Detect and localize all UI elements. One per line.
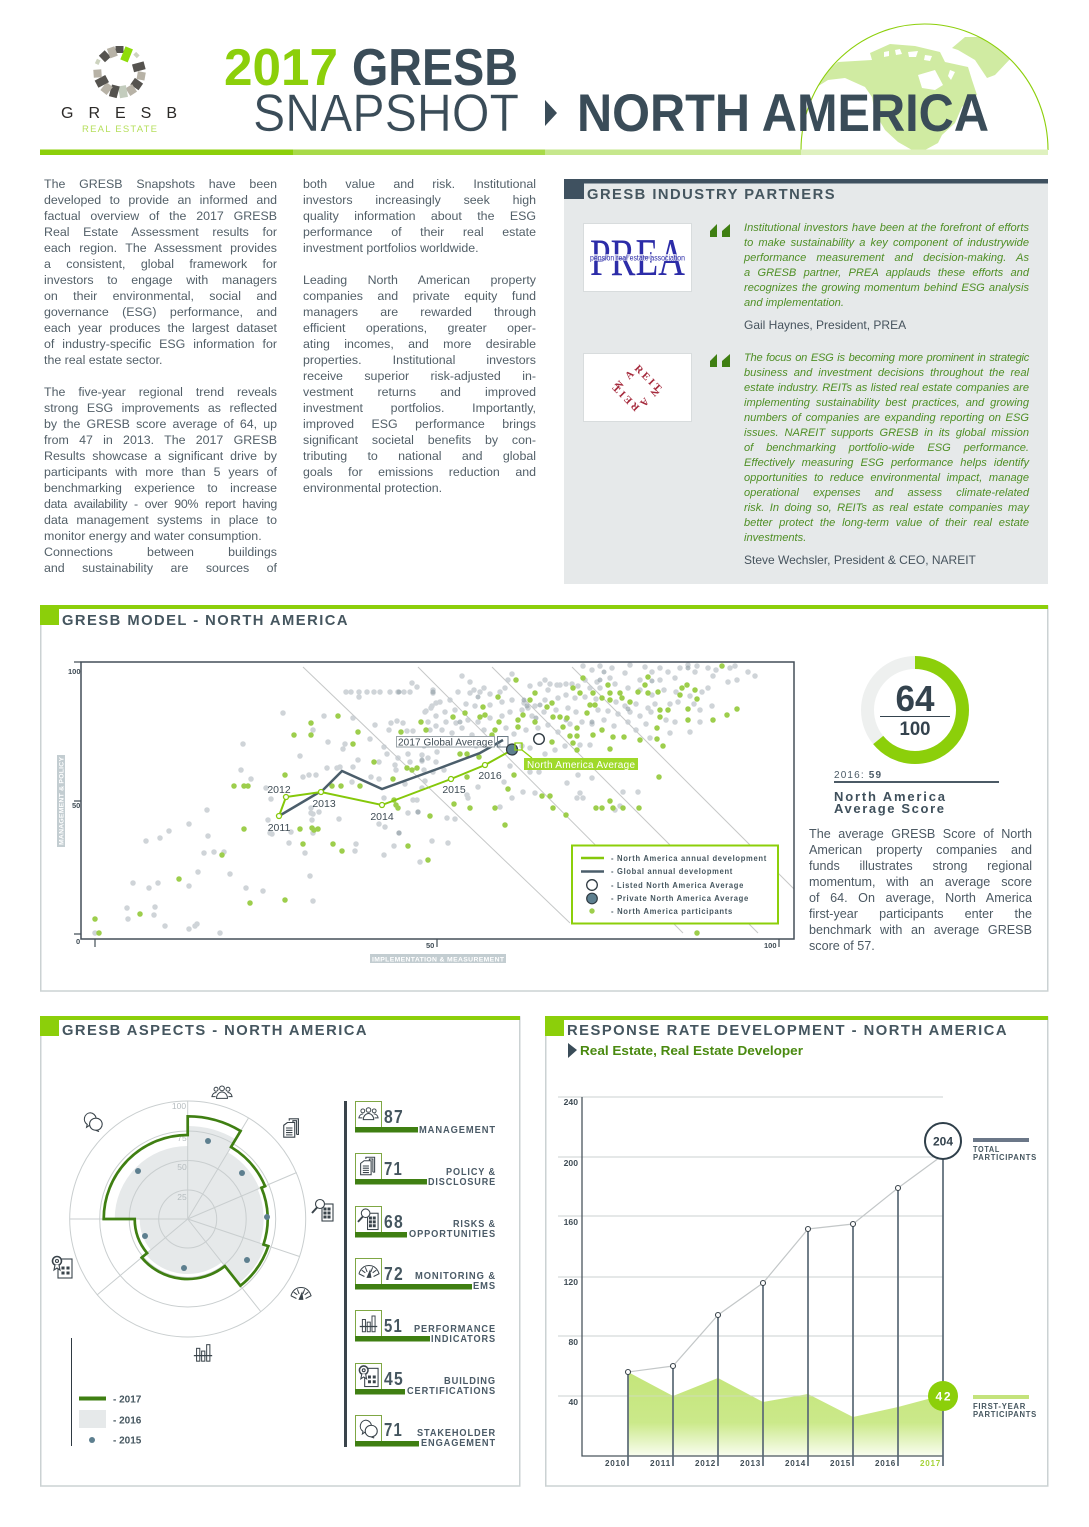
radar 2016 area <box>115 1126 265 1283</box>
chart legend: - Private North America Average <box>611 893 749 903</box>
logo: NAREIT: REIT <box>632 363 663 394</box>
aspect: policy and disclosure 71: POLICY & <box>446 1167 496 1178</box>
y axis labels: 160 <box>564 1217 578 1227</box>
chart legend: - Global annual development <box>611 866 733 876</box>
first-year participants area <box>628 1372 943 1456</box>
aspect: policy and disclosure 71: DISCLOSURE <box>428 1177 496 1188</box>
score caption: 2016: 59 <box>834 770 881 781</box>
score description text: of 64. On average, North America <box>809 891 1032 905</box>
scatter: all participants <box>95 665 755 933</box>
scatter: darker overlapping participants <box>399 668 688 833</box>
panel: GRESB aspects <box>40 1016 520 1487</box>
intro text column two: improved ESG performance brings <box>303 417 536 431</box>
GRESB logo wordmark: REAL ESTATE <box>82 124 157 135</box>
axis label: implementation and measurement: IMPLEMENTATION & MEASUREMENT <box>372 956 505 963</box>
y axis labels: 200 <box>564 1158 578 1168</box>
subheading: real estate: Real Estate, Real Estate Developer <box>580 1043 803 1058</box>
score description text: momentum, with an average score <box>809 875 1032 889</box>
intro text column one: The five-year regional trend reveals <box>44 385 277 399</box>
chart legend: - Listed North America Average <box>611 880 744 890</box>
quote: NAREIT: estate industry. REITs as listed real estate companies are <box>744 382 1029 394</box>
title line two: SNAPSHOT <box>253 84 519 143</box>
intro text column one: by the GRESB score average of 64, up <box>44 417 277 431</box>
aspect: monitoring and EMS 72: 72 <box>384 1263 404 1284</box>
attribution: PREA: Gail Haynes, President, PREA <box>744 318 906 332</box>
heading: aspects: GRESB ASPECTS - NORTH AMERICA <box>62 1022 368 1039</box>
logo: NAREIT: NA <box>613 368 637 392</box>
radar ring labels: 50 <box>177 1162 187 1172</box>
aspect: management 87: 87 <box>384 1106 404 1127</box>
icon: management <box>212 1086 232 1098</box>
quote: NAREIT: implementing sustainability best practices, and growing <box>744 397 1029 409</box>
quote: NAREIT: business and investment decisions throughout the real <box>744 367 1029 379</box>
quote: NAREIT: better protect the long-term value of their real estate <box>744 517 1029 529</box>
aspect: management 87 <box>355 1102 496 1136</box>
score caption: Average Score <box>834 801 944 816</box>
intro text column one: developed to provide an informed and <box>44 193 277 207</box>
y axis labels: 120 <box>564 1277 578 1287</box>
icon: quotation mark one <box>710 224 730 237</box>
intro text column two: properties. Institutional investors <box>303 353 536 367</box>
aspect: risks and opportunities 68: OPPORTUNITIES <box>409 1229 496 1240</box>
logo: NAREIT: REIT <box>611 382 642 413</box>
intro text column two: significant societal benefits by con- <box>303 433 536 447</box>
icon: performance <box>194 1345 212 1361</box>
callout: North America average: North America Average <box>527 760 635 771</box>
year columns <box>628 1155 943 1466</box>
intro text column one: benchmarking experience to increase <box>44 481 277 495</box>
quote: NAREIT: Effectively measuring ESG performance helps identify <box>744 457 1029 469</box>
intro text column two: companies and private equity fund <box>303 289 536 303</box>
donut: average score 64 of 100: 64 <box>896 678 934 719</box>
intro text column one: data availability - over 90% report having <box>44 497 277 511</box>
GRESB logo wordmark <box>61 105 177 135</box>
intro text column two: investors increasingly seek high <box>303 193 536 207</box>
legend: total participants <box>973 1138 1037 1162</box>
intro text column two <box>303 177 536 495</box>
legend: total participants: PARTICIPANTS <box>973 1152 1037 1162</box>
logo: PREA: pension real estate association <box>590 254 685 262</box>
logo: PREA <box>584 224 692 292</box>
score caption: North America <box>834 789 946 804</box>
radar legend: - 2015 <box>113 1436 142 1446</box>
aspect: stakeholder engagement 71: ENGAGEMENT <box>421 1438 496 1449</box>
heading: model: GRESB MODEL - NORTH AMERICA <box>62 612 349 629</box>
year labels: 2013 <box>312 798 336 810</box>
intro text column two: goals for emissions reduction and <box>303 465 536 479</box>
year labels: 2016 <box>875 1458 896 1468</box>
globe illustration <box>801 24 1048 150</box>
radar legend: - 2016 <box>113 1416 142 1426</box>
axis numbers: 0 <box>76 937 80 946</box>
axis numbers <box>68 667 777 950</box>
year labels: 2015 <box>830 1458 851 1468</box>
year labels <box>605 1458 941 1468</box>
quote: NAREIT: numbers of companies are expanding reporting on ESG <box>744 412 1029 424</box>
year labels: 2014 <box>370 811 394 823</box>
legend: first-year participants <box>973 1395 1037 1419</box>
aspect: risks and opportunities 68: RISKS & <box>453 1219 496 1230</box>
icon: stakeholder <box>84 1113 102 1132</box>
GRESB logo ring <box>94 46 145 98</box>
intro text column one: and sustainability are sources of <box>44 561 277 575</box>
quote: PREA: and implementation. <box>744 297 844 309</box>
intro text column one: data management systems in place to <box>44 513 277 527</box>
legend: first-year participants: PARTICIPANTS <box>973 1409 1037 1419</box>
callout: 42 first year <box>928 1381 958 1411</box>
quote: PREA: performance measurement and decision-making. As <box>744 252 1029 264</box>
intro text column one: monitor energy and water consumption. <box>44 529 262 543</box>
quote: NAREIT: operational expenses and assess climate-related <box>744 487 1029 499</box>
axis label: management and policy: MANAGEMENT & POLICY <box>58 757 66 845</box>
intro text column one: governance (ESG) performance, and <box>44 305 277 319</box>
score description text: benchmark with an average GRESB <box>809 923 1032 937</box>
axis numbers: 50 <box>426 941 434 950</box>
intro text column one: Connections between buildings <box>44 545 277 559</box>
year labels: 2011 <box>268 822 290 834</box>
title line one: GRESB <box>352 39 518 97</box>
line: North America annual development <box>276 750 512 818</box>
callout: 2017 global average: 2017 Global Average <box>398 738 493 748</box>
year labels: 2016 <box>478 770 502 782</box>
intro text column two: performance of their real estate <box>303 225 536 239</box>
radar ring labels: 100 <box>172 1101 186 1111</box>
aspect: performance indicators 51: PERFORMANCE <box>414 1324 496 1335</box>
axis numbers: 100 <box>68 667 81 676</box>
panel: response rate development <box>545 1016 1048 1487</box>
quote: NAREIT: issues. NAREIT supports GRESB in its global mission <box>744 427 1029 439</box>
aspect: performance indicators 51: INDICATORS <box>431 1334 496 1345</box>
donut: average score 64 of 100: 100 <box>900 719 930 740</box>
intro text column two: quality information about the ESG <box>303 209 536 223</box>
aspect: policy and disclosure 71 <box>355 1154 496 1188</box>
score description text: score of 57. <box>809 939 875 953</box>
year labels <box>267 770 502 834</box>
score description text: first-year participants enter the <box>809 907 1032 921</box>
aspect: stakeholder engagement 71: STAKEHOLDER <box>417 1428 496 1439</box>
header rule <box>40 150 1048 155</box>
intro text column one: strong ESG improvements as reflected <box>44 401 277 415</box>
radar ring labels <box>172 1101 187 1202</box>
intro text column one: factual overview of the 2017 GRESB <box>44 209 277 223</box>
quote: NAREIT: of benchmarking portfolio-wide ESG performance. <box>744 442 1029 454</box>
total points <box>626 1186 900 1374</box>
line: global annual development <box>279 740 503 816</box>
logo: NAREIT: NA <box>637 385 661 409</box>
radar legend: - 2017 <box>113 1394 142 1406</box>
aspect: risks and opportunities 68: 68 <box>384 1211 404 1232</box>
intro text column two: investment portfolios worldwide. <box>303 241 479 255</box>
quote: NAREIT: The focus on ESG is becoming more prominent in strategic <box>744 352 1029 364</box>
quote: NAREIT: investments. <box>744 532 806 544</box>
chart legend: - North America participants <box>611 906 733 916</box>
year labels: 2013 <box>740 1458 761 1468</box>
intro text column two: investment portfolios. Importantly, <box>303 401 536 415</box>
quote: NAREIT: opportunities to reduce environmental impact, manage <box>744 472 1029 484</box>
scatter chart <box>57 662 794 963</box>
callout: 204 total: 204 <box>933 1134 953 1148</box>
callout: 42 first year: 42 <box>936 1390 951 1404</box>
attribution: NAREIT: Steve Wechsler, President & CEO, NAREIT <box>744 553 976 567</box>
radar legend <box>72 1338 142 1446</box>
quote: NAREIT <box>744 352 1030 544</box>
year labels: 2012 <box>267 784 291 796</box>
quote: PREA: recognizes the growing momentum behind ESG analysis <box>744 282 1029 294</box>
score description text: funds illustrates strong regional <box>809 859 1032 873</box>
header banner <box>40 24 1049 155</box>
aspect: policy and disclosure 71: 71 <box>384 1158 403 1179</box>
year labels: 2017 <box>920 1458 941 1468</box>
intro text column one: from 47 in 2013. The 2017 GRESB <box>44 433 277 447</box>
intro text column one: Results showcase a significant drive by <box>44 449 277 463</box>
scatter: North America participants <box>95 666 737 933</box>
marker: listed North America average <box>534 734 544 744</box>
donut: average score 64 of 100 <box>868 662 962 758</box>
intro text column one: a consistent, global framework for <box>44 257 277 271</box>
year labels: 2011 <box>650 1458 671 1468</box>
intro text column one: each region. The Assessment provides <box>44 241 277 255</box>
radar 2015 dots <box>135 1138 270 1271</box>
legend: total participants: TOTAL <box>973 1144 1000 1154</box>
aspect: management 87: MANAGEMENT <box>419 1125 496 1136</box>
heading: industry partners: GRESB INDUSTRY PARTNERS <box>587 186 836 203</box>
year labels: 2014 <box>785 1458 806 1468</box>
intro text column two: managers are rewarded through <box>303 305 536 319</box>
intro text column one: investors to engage with managers <box>44 273 277 287</box>
intro text column two: ating incomes, and more desirable <box>303 337 536 351</box>
aspect: monitoring and EMS 72: MONITORING & <box>415 1271 496 1282</box>
icon: risks <box>312 1200 333 1221</box>
intro text column two: vestment returns and improved <box>303 385 536 399</box>
chart legend: - North America annual development <box>611 853 767 863</box>
icon: policy <box>284 1119 298 1137</box>
legend: first-year participants: FIRST-YEAR <box>973 1401 1026 1411</box>
y axis labels: 80 <box>568 1337 578 1347</box>
axis numbers: 50 <box>72 801 80 810</box>
score description text: The average GRESB Score of North <box>809 827 1032 841</box>
quote: PREA: a GRESB partner, PREA applauds these efforts and <box>744 267 1029 279</box>
y axis labels <box>564 1097 578 1407</box>
y axis labels: 40 <box>568 1397 578 1407</box>
radar ring labels: 75 <box>177 1133 187 1143</box>
intro text column two: receive superior risk-adjusted in- <box>303 369 536 383</box>
radar 2017 outline <box>104 1116 268 1286</box>
callout: 204 total <box>925 1123 961 1159</box>
aspect: performance indicators 51 <box>355 1310 496 1345</box>
radar chart <box>70 1101 306 1337</box>
intro text column one: The GRESB Snapshots have been <box>44 177 277 191</box>
chart frame and axes <box>74 662 794 947</box>
year labels: 2010 <box>605 1458 626 1468</box>
aspect: building certifications 45: 45 <box>384 1368 404 1389</box>
chart legend <box>572 846 778 924</box>
year labels: 2015 <box>442 784 466 796</box>
radar ring labels: 25 <box>177 1192 187 1202</box>
quote: PREA <box>744 222 1030 309</box>
intro text column two: environmental protection. <box>303 481 442 495</box>
intro text column one: on their environmental, social and <box>44 289 277 303</box>
panel: GRESB model <box>40 605 1048 992</box>
intro text column one: Real Estate Assessment results for <box>44 225 277 239</box>
icon: quotation mark two <box>710 354 730 367</box>
axis numbers: 100 <box>764 941 777 950</box>
year labels: 2012 <box>695 1458 716 1468</box>
intro text column two: tributing to national and global <box>303 449 536 463</box>
score description text <box>809 827 1032 953</box>
intro text column one: each year produces the largest dataset <box>44 321 277 335</box>
title line one <box>224 39 518 97</box>
panel: GRESB industry partners <box>564 179 1048 584</box>
aspect: building certifications 45: CERTIFICATIONS <box>407 1386 496 1397</box>
quote: PREA: Institutional investors have been at the forefront of efforts <box>744 222 1029 234</box>
quote: NAREIT: risk. In doing so, REITs as real estate companies may <box>744 502 1029 514</box>
score caption <box>834 770 999 816</box>
intro text column one: participants with more than 5 years of <box>44 465 277 479</box>
score description text: American property companies and <box>809 843 1032 857</box>
y axis labels: 240 <box>564 1097 578 1107</box>
callout: North America average <box>515 743 638 771</box>
aspect: risks and opportunities 68 <box>355 1206 496 1240</box>
aspect: monitoring and EMS 72: EMS <box>473 1281 496 1292</box>
intro text column one: the real estate sector. <box>44 353 162 367</box>
marker: private North America average <box>506 744 518 755</box>
intro text column two: both value and risk. Institutional <box>303 177 536 191</box>
aspect score list <box>346 1101 496 1449</box>
intro text column two: Leading North American property <box>303 273 536 287</box>
aspect: monitoring and EMS 72 <box>355 1258 496 1292</box>
title line two <box>253 84 989 143</box>
aspect: stakeholder engagement 71 <box>355 1416 496 1449</box>
quote: PREA: to make sustainability a key component of industrywide <box>744 237 1029 249</box>
aspect: building certifications 45: BUILDING <box>444 1376 496 1387</box>
heading: response rate: RESPONSE RATE DEVELOPMENT - NORTH AMERICA <box>567 1022 1008 1039</box>
total participants line <box>628 1155 943 1372</box>
icon: monitoring <box>291 1288 311 1299</box>
title line one: 2017 <box>224 39 338 97</box>
intro text column two: efficient operations, greater oper- <box>303 321 536 335</box>
line and area chart <box>558 1097 961 1468</box>
intro text column one: of industry-specific ESG information for <box>44 337 277 351</box>
GRESB logo wordmark: GRESB <box>61 105 177 122</box>
aspect: performance indicators 51: 51 <box>384 1315 403 1336</box>
logo: NAREIT <box>584 354 692 422</box>
title line two: NORTH AMERICA <box>577 84 989 143</box>
logo: PREA: PREA <box>590 229 685 287</box>
aspect: stakeholder engagement 71: 71 <box>384 1419 403 1440</box>
intro text column one <box>44 177 277 575</box>
icon: certifications <box>52 1256 72 1278</box>
aspect: building certifications 45 <box>355 1364 496 1397</box>
